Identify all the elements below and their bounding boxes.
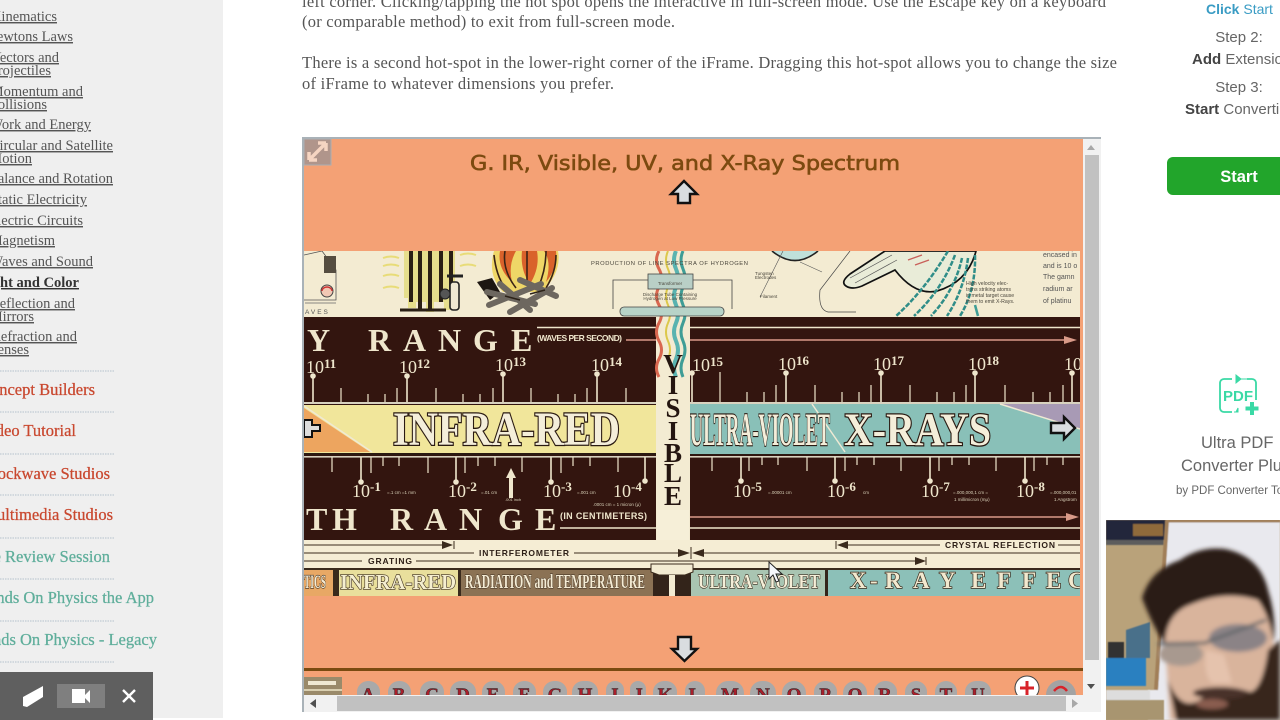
frequency labels: 11 — [324, 356, 336, 371]
ultra-violet and x-ray band: ULTRA-VIOLET — [690, 404, 830, 456]
frequency labels — [308, 356, 1080, 373]
wavelength labels: 1 millimicron (mμ) — [954, 497, 990, 502]
pillar — [651, 564, 693, 575]
wavelength labels: =.00001 cm — [768, 490, 792, 495]
shelf — [1106, 520, 1166, 545]
wavelength labels: .001 inch — [505, 497, 521, 502]
alphabet navigation buttons: S — [911, 685, 921, 706]
illustration: electron tube fragment: AVES — [305, 309, 330, 316]
instructions text block — [302, 0, 1117, 93]
alphabet navigation buttons: C — [425, 685, 439, 706]
x-rays title: X-RAYS — [844, 404, 991, 456]
panel: right advert product — [1176, 375, 1280, 497]
product name: Ultra PDF — [1201, 434, 1273, 452]
icon: close — [123, 690, 135, 702]
wavelength labels: -3 — [561, 479, 572, 494]
alphabet navigation buttons: M — [721, 685, 739, 706]
alphabet navigation buttons — [357, 681, 991, 707]
interferometer label: INTERFEROMETER — [479, 548, 569, 558]
step 3 — [1185, 79, 1280, 118]
wavelength labels: 10 — [921, 481, 939, 501]
visible vertical label: I — [668, 370, 678, 400]
alphabet navigation buttons: O — [787, 685, 801, 706]
recording toolbar — [0, 672, 153, 720]
effects band: TICS — [304, 572, 326, 593]
illustration: hydrogen spectra tube: Hydrogen at Low Pressure — [643, 296, 697, 301]
step 2: Step 2: — [1215, 29, 1263, 46]
moustache and mouth — [1193, 687, 1247, 699]
visible vertical label: I — [668, 416, 678, 446]
visible vertical label: B — [664, 438, 682, 468]
illustration: hydrogen spectra tube: Transformer — [658, 281, 683, 286]
panel: interactive iframe — [302, 137, 1101, 712]
divider band — [304, 668, 1083, 671]
illustration: hydrogen spectra tube: Discharge Tube Containing — [643, 292, 698, 297]
wavelength labels: 10 — [827, 481, 845, 501]
illustration: x-ray tube: of platinu — [1043, 298, 1072, 305]
step 2 — [1192, 29, 1280, 68]
infra-red band — [304, 403, 1080, 456]
heading: G. IR, Visible, UV, and X-Ray Spectrum — [470, 151, 900, 175]
alphabet navigation buttons: H — [578, 685, 593, 706]
frequency labels: 10 — [495, 355, 513, 375]
frequency labels: 10 — [306, 357, 324, 377]
wavelength labels: =.1 cm =1 mm — [387, 490, 416, 495]
alphabet navigation buttons: J — [633, 685, 643, 706]
alphabet navigation buttons: D — [456, 685, 470, 706]
frequency labels: 10 — [968, 354, 986, 374]
wavelength labels: cm — [863, 490, 869, 495]
alphabet navigation buttons: E — [487, 685, 499, 706]
zoom in button — [1015, 676, 1039, 700]
illustration: x-ray tube: Tungsten — [755, 271, 774, 276]
up arrow marker — [506, 468, 516, 498]
waves per second caption: (WAVES PER SECOND) — [537, 333, 622, 343]
chart poster: electromagnetic spectrum — [304, 251, 1085, 596]
wavelength labels: 10 — [448, 481, 466, 501]
alphabet navigation buttons: K — [658, 685, 673, 706]
x-ray rays — [896, 251, 975, 316]
wavelength labels: -8 — [1034, 479, 1045, 494]
nose — [1205, 650, 1232, 683]
glasses — [1159, 642, 1203, 666]
valve — [440, 276, 463, 310]
product name — [1181, 434, 1280, 475]
reset button — [1046, 680, 1076, 710]
wavelength labels: =.001 cm — [577, 490, 596, 495]
panel: right advert steps — [1167, 1, 1280, 195]
measurement methods strip — [304, 541, 1080, 565]
topic links list — [0, 9, 114, 358]
webcam video inset — [1106, 520, 1280, 720]
desk bin — [1106, 622, 1164, 720]
start button — [1167, 157, 1280, 195]
dark frequency band — [304, 317, 1082, 406]
alphabet navigation buttons: I — [611, 685, 619, 706]
visible vertical label: S — [665, 393, 681, 423]
effects band: RADIATION and TEMPERATURE — [465, 571, 645, 593]
wavelength labels: 10 — [543, 481, 561, 501]
visible vertical label: E — [664, 481, 682, 511]
illustration: radiator — [383, 251, 476, 312]
start button: Start — [1220, 168, 1258, 186]
illustration: electron tube fragment — [304, 251, 336, 316]
wavelength labels: -2 — [466, 479, 477, 494]
frequency range heading: YRANGE — [307, 322, 532, 358]
wavelength labels: -5 — [751, 479, 762, 494]
wavelength range heading: THRANGE — [306, 501, 556, 537]
wavelength labels: 10 — [1016, 481, 1034, 501]
wavelength labels: -6 — [845, 479, 856, 494]
wavelength labels: 10 — [613, 481, 631, 501]
effects band — [304, 564, 1085, 596]
effects band: INFRA-RED — [340, 570, 456, 594]
alphabet navigation buttons: U — [971, 685, 985, 706]
whiteboard — [1148, 520, 1280, 720]
effects band: X-RAYEFFEC — [850, 568, 1085, 593]
frequency labels: 10 — [873, 354, 891, 374]
wavelength labels: .0001 cm = 1 micron (μ) — [593, 502, 641, 507]
grating label: GRATING — [368, 556, 412, 566]
alphabet navigation buttons: R — [878, 685, 892, 706]
visible vertical label: V — [663, 349, 683, 379]
frequency labels: 10 — [591, 355, 609, 375]
illustration: x-ray tube: The gamn — [1043, 274, 1075, 281]
instructions text block: There is a second hot-spot in the lower-right corner of the iFrame. Dragging this hot-spot allows you to change the size — [302, 53, 1117, 72]
frequency labels: 14 — [609, 354, 622, 369]
icon: mouse cursor — [769, 562, 782, 582]
dark wavelength band — [304, 455, 1080, 540]
wavelength labels: =.000,000,1 cm = — [953, 490, 988, 495]
icon: PDF plus: PDF — [1223, 388, 1253, 405]
illustration: hydrogen spectra tube: PRODUCTION OF LINE SPECTRA OF HYDROGEN — [591, 261, 748, 267]
panel: left navigation sidebar — [0, 0, 223, 718]
instructions text block: (or comparable method) to exit from full-screen mode. — [302, 12, 675, 31]
frequency labels: 16 — [796, 353, 810, 368]
illustration: x-ray tube — [755, 251, 1077, 316]
wavelength labels: -4 — [631, 479, 642, 494]
resource links list — [0, 371, 158, 662]
icon: down arrow — [672, 637, 697, 661]
frequency labels: 10 — [399, 357, 417, 377]
illustration: x-ray tube: radium ar — [1043, 286, 1073, 293]
alphabet navigation buttons: N — [756, 685, 770, 706]
wavelength labels: 10 — [352, 481, 370, 501]
frequency labels: 17 — [891, 353, 904, 368]
frequency labels: 10 — [692, 355, 710, 375]
thumbnail — [304, 677, 342, 695]
person — [1142, 548, 1280, 720]
infra-red title: INFRA-RED — [393, 403, 620, 456]
frequency labels: 13 — [513, 354, 526, 369]
band arrows — [304, 420, 320, 437]
illustration: x-ray tube: them to emit X-Rays. — [966, 299, 1014, 305]
visible column — [656, 251, 690, 540]
face — [1165, 596, 1280, 720]
wavelength labels: 1 Angstrom — [1054, 497, 1077, 502]
illustration: x-ray tube: High velocity elec- — [966, 281, 1008, 287]
wavelength labels: -7 — [939, 479, 950, 494]
frequency labels: 10 — [1064, 354, 1082, 374]
hair — [1142, 548, 1274, 650]
centimeters caption: (IN CENTIMETERS) — [560, 511, 647, 521]
alphabet navigation buttons: G — [548, 685, 563, 706]
illustration: x-ray tube: in metal target cause — [966, 293, 1014, 299]
illustration: x-ray tube: trons striking atoms — [966, 287, 1011, 293]
vertical scrollbar — [1083, 139, 1101, 695]
wavelength labels: -1 — [370, 479, 381, 494]
illustration: campfire — [477, 251, 559, 312]
alphabet navigation buttons: T — [940, 685, 953, 706]
visible vertical label: L — [664, 458, 682, 488]
frequency labels: 12 — [417, 356, 430, 371]
alphabet navigation buttons: Q — [848, 685, 862, 706]
illustration: x-ray tube: and is 10 o — [1043, 263, 1077, 270]
alphabet navigation buttons: P — [819, 685, 831, 706]
icon: pen — [23, 686, 43, 707]
alphabet navigation buttons: F — [518, 685, 530, 706]
frequency labels: 15 — [710, 354, 724, 369]
frequency labels: 18 — [986, 353, 1000, 368]
alphabet navigation buttons: L — [689, 685, 701, 706]
wavelength ticks — [332, 457, 1063, 498]
crystal reflection label: CRYSTAL REFLECTION — [945, 540, 1055, 550]
illustration: x-ray tube: Electrodes — [755, 275, 777, 280]
wavelength labels: =.000,000,01 — [1050, 490, 1077, 495]
frequency labels: 10 — [778, 354, 796, 374]
alphabet navigation buttons: B — [393, 685, 406, 706]
icon: up arrow — [671, 181, 697, 203]
illustration: hydrogen spectra tube — [591, 261, 748, 316]
instructions text block: of iFrame to whatever dimensions you prefer. — [302, 74, 614, 93]
wavelength labels — [354, 482, 1076, 507]
icon: camera — [72, 689, 90, 703]
frequency ticks — [310, 370, 1075, 402]
icon: fullscreen hot-spot — [304, 139, 331, 165]
wavelength labels: =.01 cm — [481, 490, 497, 495]
wavelength labels: 10 — [733, 481, 751, 501]
step 1: Click Start — [1206, 1, 1273, 17]
alphabet navigation buttons: A — [361, 685, 375, 706]
step 3: Step 3: — [1215, 79, 1263, 96]
beard — [1168, 640, 1280, 720]
visible vertical label — [664, 355, 682, 505]
effects band: ULTRA-VIOLET — [698, 571, 821, 593]
illustration: x-ray tube: Filament — [760, 294, 778, 299]
illustration: x-ray tube: encased in — [1043, 252, 1077, 259]
horizontal scrollbar — [304, 695, 1101, 712]
